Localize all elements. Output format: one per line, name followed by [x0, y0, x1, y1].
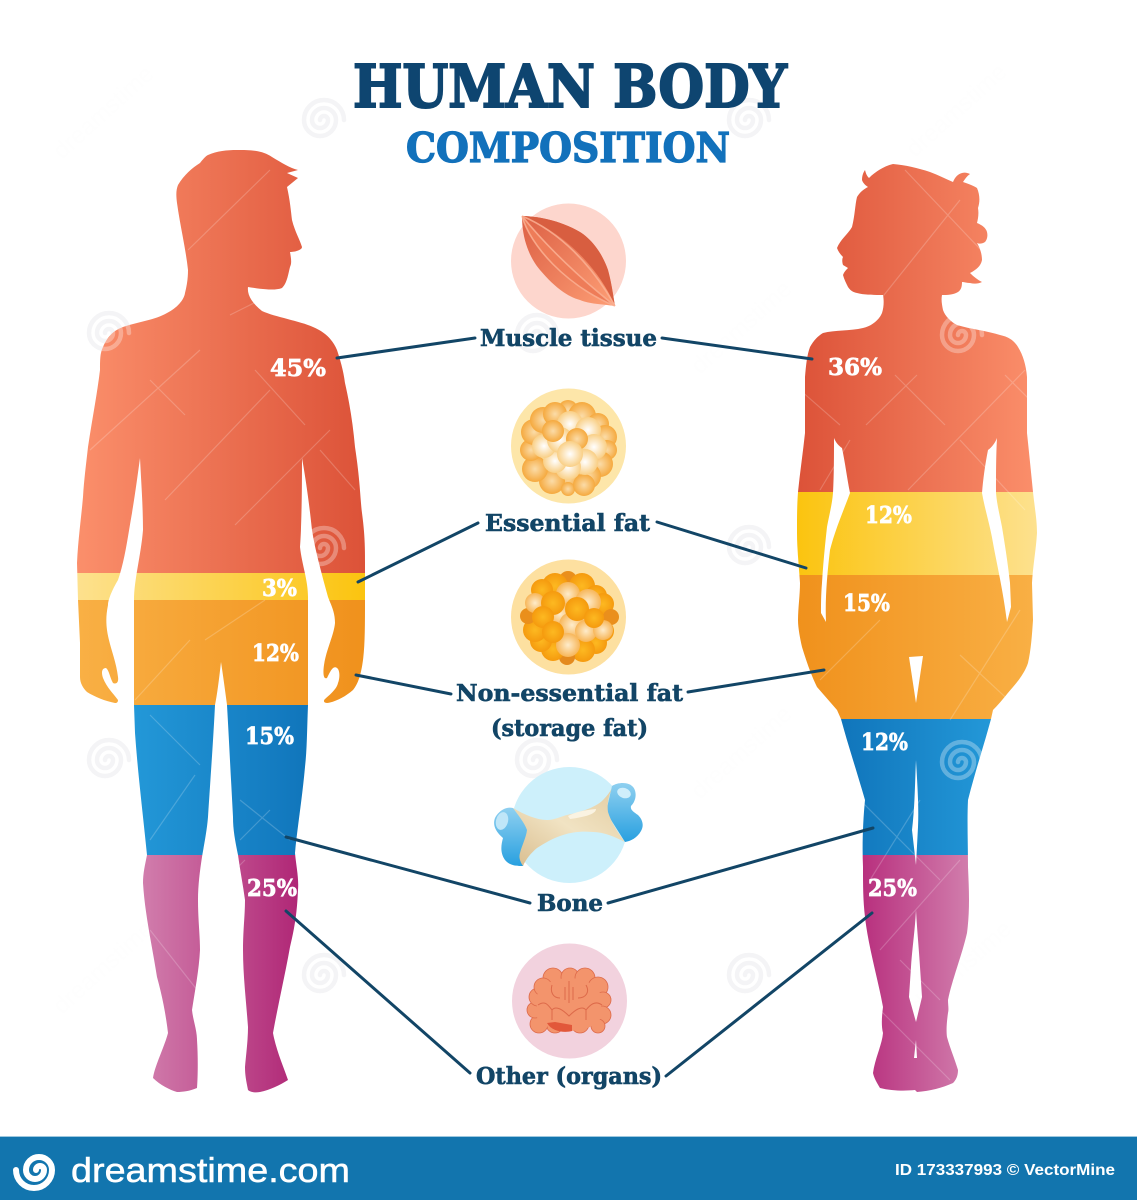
male silhouette with composition bands: [70, 145, 370, 1100]
icon: bone: [494, 767, 643, 883]
label: other organs: Other (organs): [476, 1063, 662, 1090]
male percentages: 15%: [245, 723, 294, 750]
female percentages: 15%: [843, 590, 890, 617]
female silhouette with composition bands: [790, 160, 1040, 1095]
male percentages: 3%: [262, 575, 297, 602]
icon: brain / organs: [512, 944, 627, 1058]
leader lines: [286, 338, 873, 1076]
icon: muscle: [511, 204, 626, 318]
icon: watermark logo: [16, 1157, 52, 1188]
label: non-essential fat: [456, 680, 683, 742]
watermark: faint spirals and marks: dreamstime: [48, 61, 159, 164]
label: essential fat: Essential fat: [485, 510, 650, 537]
label: non-essential fat: (storage fat): [491, 715, 648, 742]
watermark: faint spirals and marks: dreamstime: [686, 701, 797, 804]
female percentages: 12%: [861, 729, 908, 756]
female percentages: 25%: [868, 875, 917, 902]
brand name: dreamstime.com: [71, 1152, 350, 1190]
icon: essential fat cells: [511, 388, 626, 504]
title: HUMAN BODY: [353, 52, 788, 121]
watermark: faint spirals and marks: dreamstime: [901, 59, 1012, 162]
image id: ID 173337993 © VectorMine: [895, 1162, 1115, 1179]
title: COMPOSITION: [406, 124, 730, 172]
title: [353, 52, 788, 172]
icon: non-essential fat cells: [511, 560, 626, 674]
female percentages: 36%: [828, 354, 882, 381]
male percentages: 12%: [252, 640, 299, 667]
footer bar: [0, 1136, 1137, 1200]
watermark: faint spirals and marks: [48, 59, 1017, 1019]
female percentages: [828, 354, 917, 902]
female percentages: 12%: [865, 502, 912, 529]
label: bone: Bone: [537, 890, 603, 917]
male percentages: 45%: [270, 355, 326, 382]
label: non-essential fat: Non-essential fat: [456, 680, 683, 707]
watermark: faint spirals and marks: dreamstime: [906, 916, 1017, 1019]
watermark: faint spirals and marks: dreamstime: [686, 276, 797, 379]
male percentages: [245, 355, 326, 902]
label: muscle tissue: Muscle tissue: [480, 325, 657, 352]
male percentages: 25%: [247, 875, 297, 902]
watermark: faint spirals and marks: dreamstime: [48, 916, 159, 1019]
